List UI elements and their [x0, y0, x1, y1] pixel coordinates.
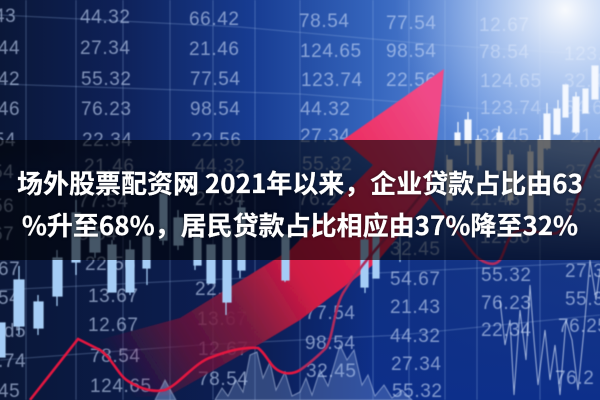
data table numbers: 22.: [195, 279, 223, 300]
data table numbers: 12.67: [88, 315, 139, 336]
data table numbers: 21.46: [84, 156, 135, 177]
dark title band: [0, 140, 600, 260]
data table numbers: 44.32: [390, 326, 441, 347]
title: [17, 164, 583, 243]
data table numbers: 76.23: [81, 99, 132, 120]
data table numbers: 21.46: [189, 39, 240, 60]
data table numbers: 98.54: [305, 333, 356, 354]
data table numbers: 13.67: [197, 309, 248, 330]
data table numbers: 123.74: [480, 98, 542, 119]
data table numbers: 78.54: [90, 346, 141, 367]
data table numbers: 5.54: [78, 224, 117, 245]
data table numbers: 78.54: [479, 42, 530, 63]
data table numbers: 27.34: [391, 354, 442, 375]
candlesticks on right: [447, 66, 598, 220]
data table numbers: 77.54: [78, 191, 129, 212]
data table numbers: 12.56: [480, 227, 531, 248]
title: %升至68%，居民贷款占比相应由37%降至32%: [22, 206, 578, 243]
data table numbers: 22.56: [85, 254, 136, 275]
red trend line: [30, 148, 600, 400]
data table numbers: 66.42: [189, 9, 240, 30]
data table numbers: 55.32: [81, 69, 132, 90]
data table numbers: 124.65: [480, 71, 542, 92]
title: 场外股票配资网 2021年以来，企业贷款占比由63: [17, 164, 583, 201]
data table numbers: 44.32: [195, 156, 246, 177]
data table numbers: 44.32: [300, 99, 351, 120]
data table numbers: 27.34: [300, 126, 351, 147]
data table numbers: 21.43: [470, 189, 521, 210]
data table numbers: 22.34: [82, 130, 133, 151]
data table numbers: 54.67: [390, 269, 441, 290]
data table numbers: 12.67: [198, 339, 249, 360]
data table numbers: 76.23: [298, 189, 349, 210]
waveform chart: [155, 260, 600, 400]
data table numbers: 13.67: [88, 286, 139, 307]
data table numbers: 32.45: [306, 361, 357, 382]
data table numbers: 32.45: [479, 126, 530, 147]
data table numbers: 22.34: [481, 320, 532, 341]
data table numbers: 98.54: [386, 41, 437, 62]
data table numbers: 21.43: [390, 297, 441, 318]
data table numbers: 44.32: [80, 7, 131, 28]
data table numbers: 27.34: [195, 189, 246, 210]
data table numbers: 123.74: [301, 70, 363, 91]
data table numbers: 77.54: [305, 303, 356, 324]
data table numbers: 55.32: [302, 154, 353, 175]
data table numbers: 124.65: [300, 41, 362, 62]
data table numbers: 77.54: [386, 13, 437, 34]
data table numbers: 22.56: [386, 70, 437, 91]
data table numbers: 12.67: [479, 15, 530, 36]
data table numbers: 76.2: [555, 368, 594, 389]
data table numbers: 32.45: [390, 239, 441, 260]
data table numbers: 124.65: [90, 376, 152, 397]
data table numbers: 22.56: [191, 130, 242, 151]
data table numbers: 55.32: [481, 265, 532, 286]
candlestick chart: [0, 185, 400, 357]
data table numbers: 78.54: [198, 369, 249, 390]
data table numbers: 27.34: [80, 38, 131, 59]
data table numbers: 76.23: [481, 293, 532, 314]
data table numbers: 98.54: [190, 99, 241, 120]
data table numbers: 78.54: [299, 11, 350, 32]
icon: rising red arrow: [95, 69, 444, 400]
data table numbers: 77.54: [190, 69, 241, 90]
